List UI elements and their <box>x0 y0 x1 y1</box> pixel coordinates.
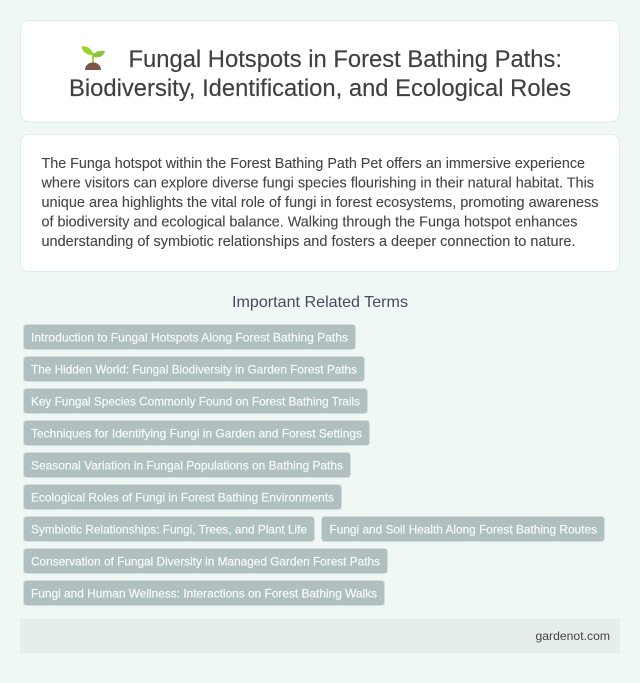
icon: sprout <box>82 46 105 70</box>
tag 4 <box>24 420 370 446</box>
tag 6 <box>24 484 342 510</box>
tag 3: Key Fungal Species Commonly Found on Forest Bathing Trails <box>31 394 360 408</box>
tag 7: Symbiotic Relationships: Fungi, Trees, and Plant Life <box>31 522 307 536</box>
related terms tags <box>24 324 604 606</box>
tag 9: Conservation of Fungal Diversity in Managed Garden Forest Paths <box>31 554 380 568</box>
heading: important related terms: Important Related Terms <box>232 294 408 311</box>
panel: title header <box>20 20 620 122</box>
tag 2 <box>24 356 364 382</box>
title text <box>69 46 571 102</box>
tag 10: Fungi and Human Wellness: Interactions on Forest Bathing Walks <box>31 586 377 600</box>
tag 5 <box>24 452 350 478</box>
tag 1 <box>24 324 356 350</box>
footer source text: gardenot.com <box>536 629 610 643</box>
title text: Biodiversity, Identification, and Ecological Roles <box>69 75 571 102</box>
tag 3 <box>24 388 368 414</box>
tag 8: Fungi and Soil Health Along Forest Bathing Routes <box>330 522 597 536</box>
footer <box>20 619 620 653</box>
title text: Fungal Hotspots in Forest Bathing Paths: <box>128 46 562 73</box>
tag 9 <box>24 548 388 574</box>
description text: unique area highlights the vital role of fungi in forest ecosystems, promoting awareness <box>42 195 598 211</box>
description text: The Funga hotspot within the Forest Bathing Path Pet offers an immersive experience <box>42 156 585 172</box>
description text: understanding of symbiotic relationships and fosters a deeper connection to nature. <box>42 234 576 250</box>
panel: description <box>20 134 620 272</box>
tag 10 <box>24 580 384 606</box>
tag 6: Ecological Roles of Fungi in Forest Bathing Environments <box>31 490 334 504</box>
description text <box>40 156 599 250</box>
description text: of biodiversity and ecological balance. Walking through the Funga hotspot enhances <box>42 214 578 230</box>
tag 2: The Hidden World: Fungal Biodiversity in Garden Forest Paths <box>31 362 357 376</box>
tag 1: Introduction to Fungal Hotspots Along Forest Bathing Paths <box>31 330 348 344</box>
tag 7 <box>24 516 314 542</box>
description text: where visitors can explore diverse fungi species flourishing in their natural habitat. This <box>40 176 594 192</box>
tag 4: Techniques for Identifying Fungi in Garden and Forest Settings <box>31 426 362 440</box>
tag 8 <box>322 516 604 542</box>
tag 5: Seasonal Variation in Fungal Populations on Bathing Paths <box>31 458 343 472</box>
